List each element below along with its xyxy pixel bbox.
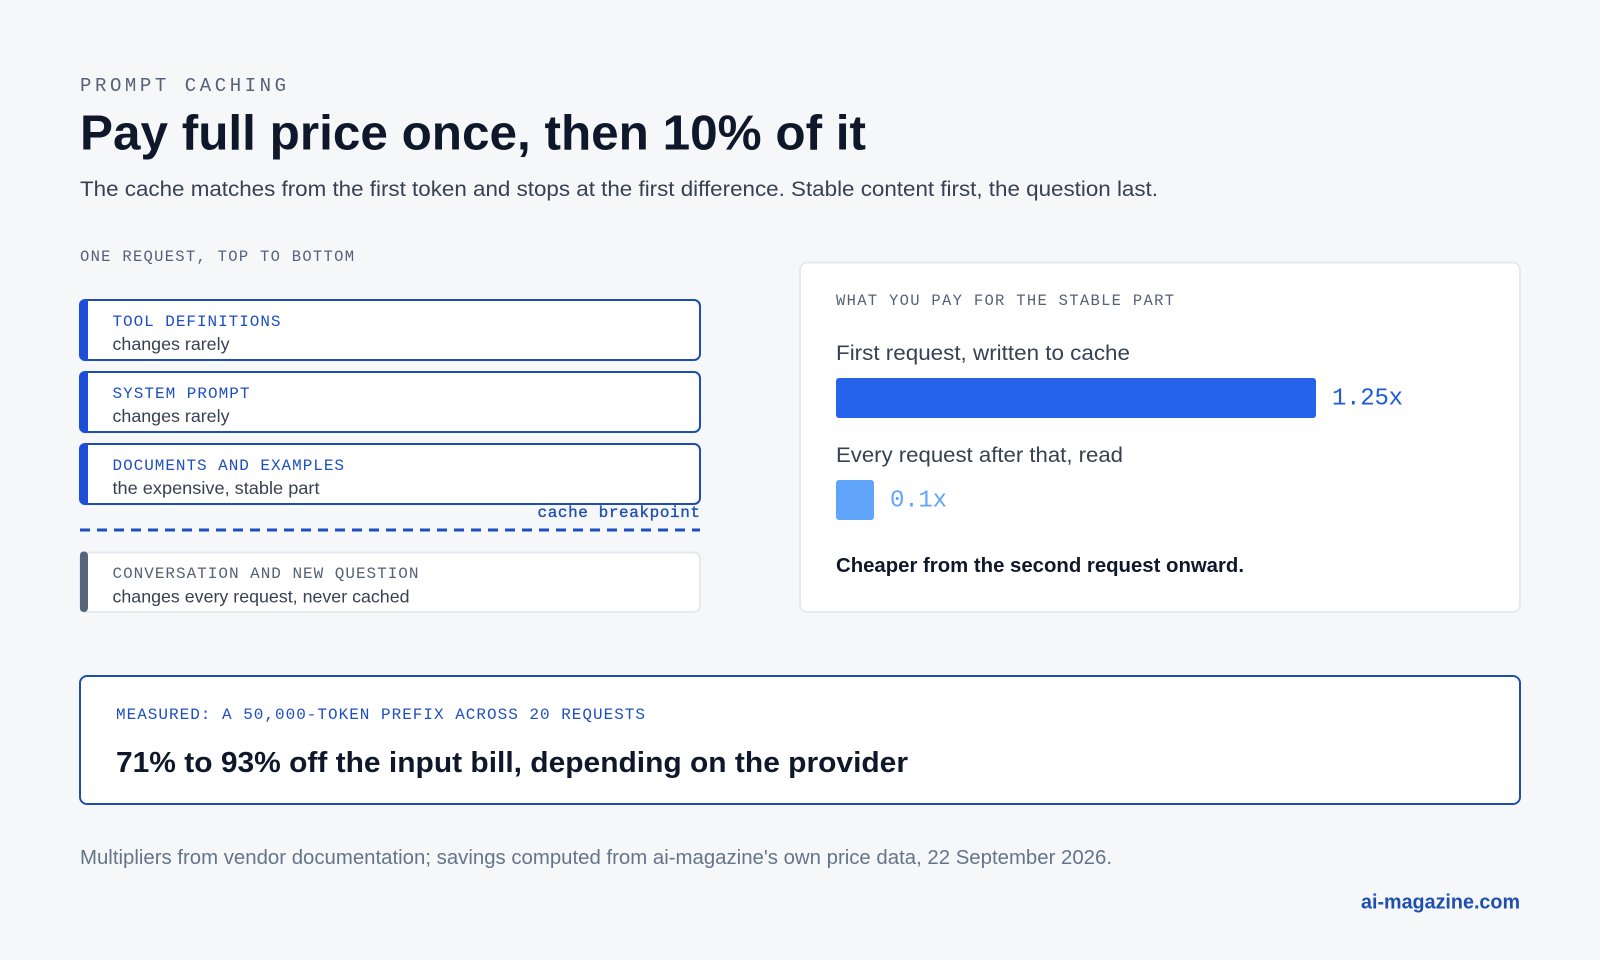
eyebrow: PROMPT CACHING: [80, 75, 286, 97]
layer: system prompt: changes rarely: [112, 406, 230, 426]
layer: documents and examples: DOCUMENTS AND EXAMPLES: [112, 457, 344, 475]
callout headline: 71% to 93% off the input bill, depending on the provider: [116, 747, 908, 779]
stack heading: ONE REQUEST, TOP TO BOTTOM: [80, 248, 354, 266]
layer: tool definitions: [79, 299, 700, 361]
site credit: ai-magazine.com: [1361, 892, 1520, 914]
layer: documents and examples: the expensive, stable part: [112, 478, 320, 498]
row label: first request: First request, written to cache: [836, 342, 1130, 365]
layer: system prompt: [79, 371, 700, 433]
cache breakpoint label: cache breakpoint: [538, 504, 700, 522]
panel: what you pay: [800, 262, 1520, 612]
layer: tool definitions: changes rarely: [112, 334, 230, 354]
callout label: MEASURED: A 50,000-TOKEN PREFIX ACROSS 20 REQUESTS: [116, 706, 645, 724]
header: [80, 75, 1158, 201]
layer: conversation and new question: [80, 552, 700, 612]
value: 0.1x: 0.1x: [890, 488, 947, 514]
value: 1.25x: 1.25x: [1332, 386, 1403, 412]
layer: conversation and new question: changes every request, never cached: [112, 586, 410, 606]
row label: every later request: Every request after that, read: [836, 444, 1123, 467]
panel conclusion: Cheaper from the second request onward.: [836, 555, 1244, 577]
title: Pay full price once, then 10% of it: [80, 106, 866, 160]
layer: documents and examples: [79, 443, 700, 505]
cache breakpoint dashed line: [80, 528, 700, 532]
subtitle: The cache matches from the first token and stops at the first difference. Stable content first, the question last.: [80, 177, 1158, 201]
layer: tool definitions: TOOL DEFINITIONS: [112, 313, 280, 331]
layer: system prompt: SYSTEM PROMPT: [112, 385, 250, 403]
bar: 0.1x read cost: [836, 480, 874, 520]
panel heading: WHAT YOU PAY FOR THE STABLE PART: [836, 292, 1174, 310]
source note: Multipliers from vendor documentation; savings computed from ai-magazine's own price data, 22 September 2026.: [80, 847, 1112, 869]
layer: conversation and new question: CONVERSATION AND NEW QUESTION: [112, 565, 418, 583]
callout: measured savings: [80, 676, 1520, 804]
bar: 1.25x write cost: [836, 378, 1316, 418]
panel: request stack: [79, 248, 700, 612]
